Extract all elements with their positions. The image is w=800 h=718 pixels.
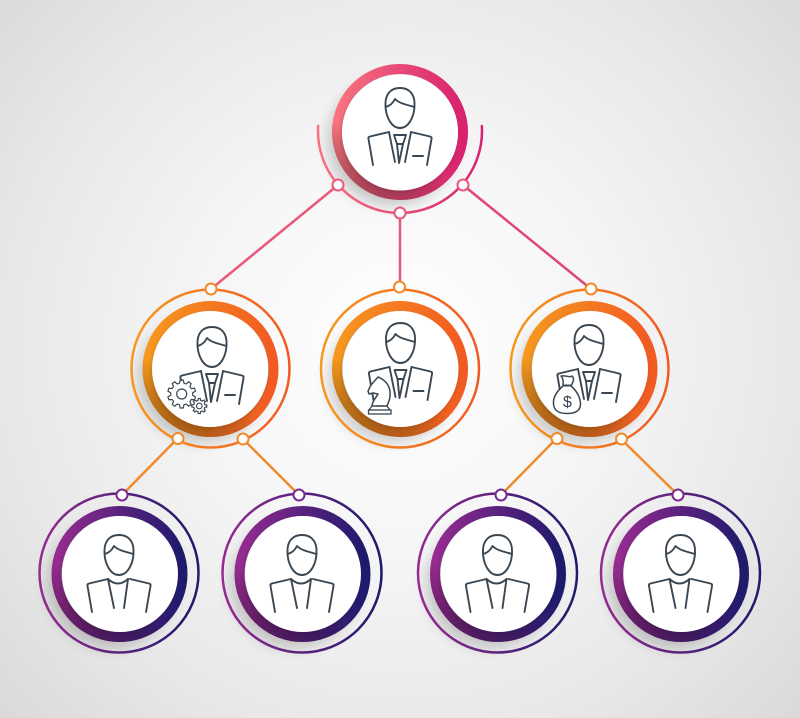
connector: top to right branch — [463, 185, 591, 289]
panel: top executive node — [328, 69, 463, 206]
connector: left branch to staff 2 — [243, 439, 299, 495]
icon: manager with money bag: $ — [563, 394, 572, 411]
connector: right branch to staff 3 — [501, 438, 557, 495]
connector dots: managers — [172, 282, 627, 444]
panel: staff 2 — [222, 494, 382, 652]
connector: right branch to staff 4 — [621, 439, 678, 495]
icon: staff person — [87, 535, 151, 612]
icon: manager with gears — [167, 327, 244, 414]
panel: staff 1 — [40, 494, 198, 652]
connector: left branch to staff 1 — [122, 438, 178, 495]
icon: small gear — [192, 398, 207, 414]
panel: manager centre, strategy — [321, 290, 479, 448]
panel: staff 4 — [601, 494, 760, 652]
connector: top to left branch — [211, 185, 338, 289]
icon: manager with chess knight — [368, 323, 432, 414]
panel: staff 3 — [418, 494, 577, 652]
panel: manager right, finance — [510, 290, 668, 448]
icon: executive — [368, 88, 432, 165]
icon: manager with money bag — [553, 325, 621, 414]
icon: staff person — [270, 535, 334, 612]
connector dots: top arc — [332, 180, 468, 218]
icon: large gear — [167, 380, 196, 408]
connector: top to centre branch — [399, 213, 401, 287]
icon: staff person — [649, 535, 712, 612]
top arc — [318, 126, 482, 213]
connector dots: staff — [116, 490, 684, 500]
panel: manager left, operations — [132, 290, 290, 448]
icon: staff person — [466, 535, 529, 612]
